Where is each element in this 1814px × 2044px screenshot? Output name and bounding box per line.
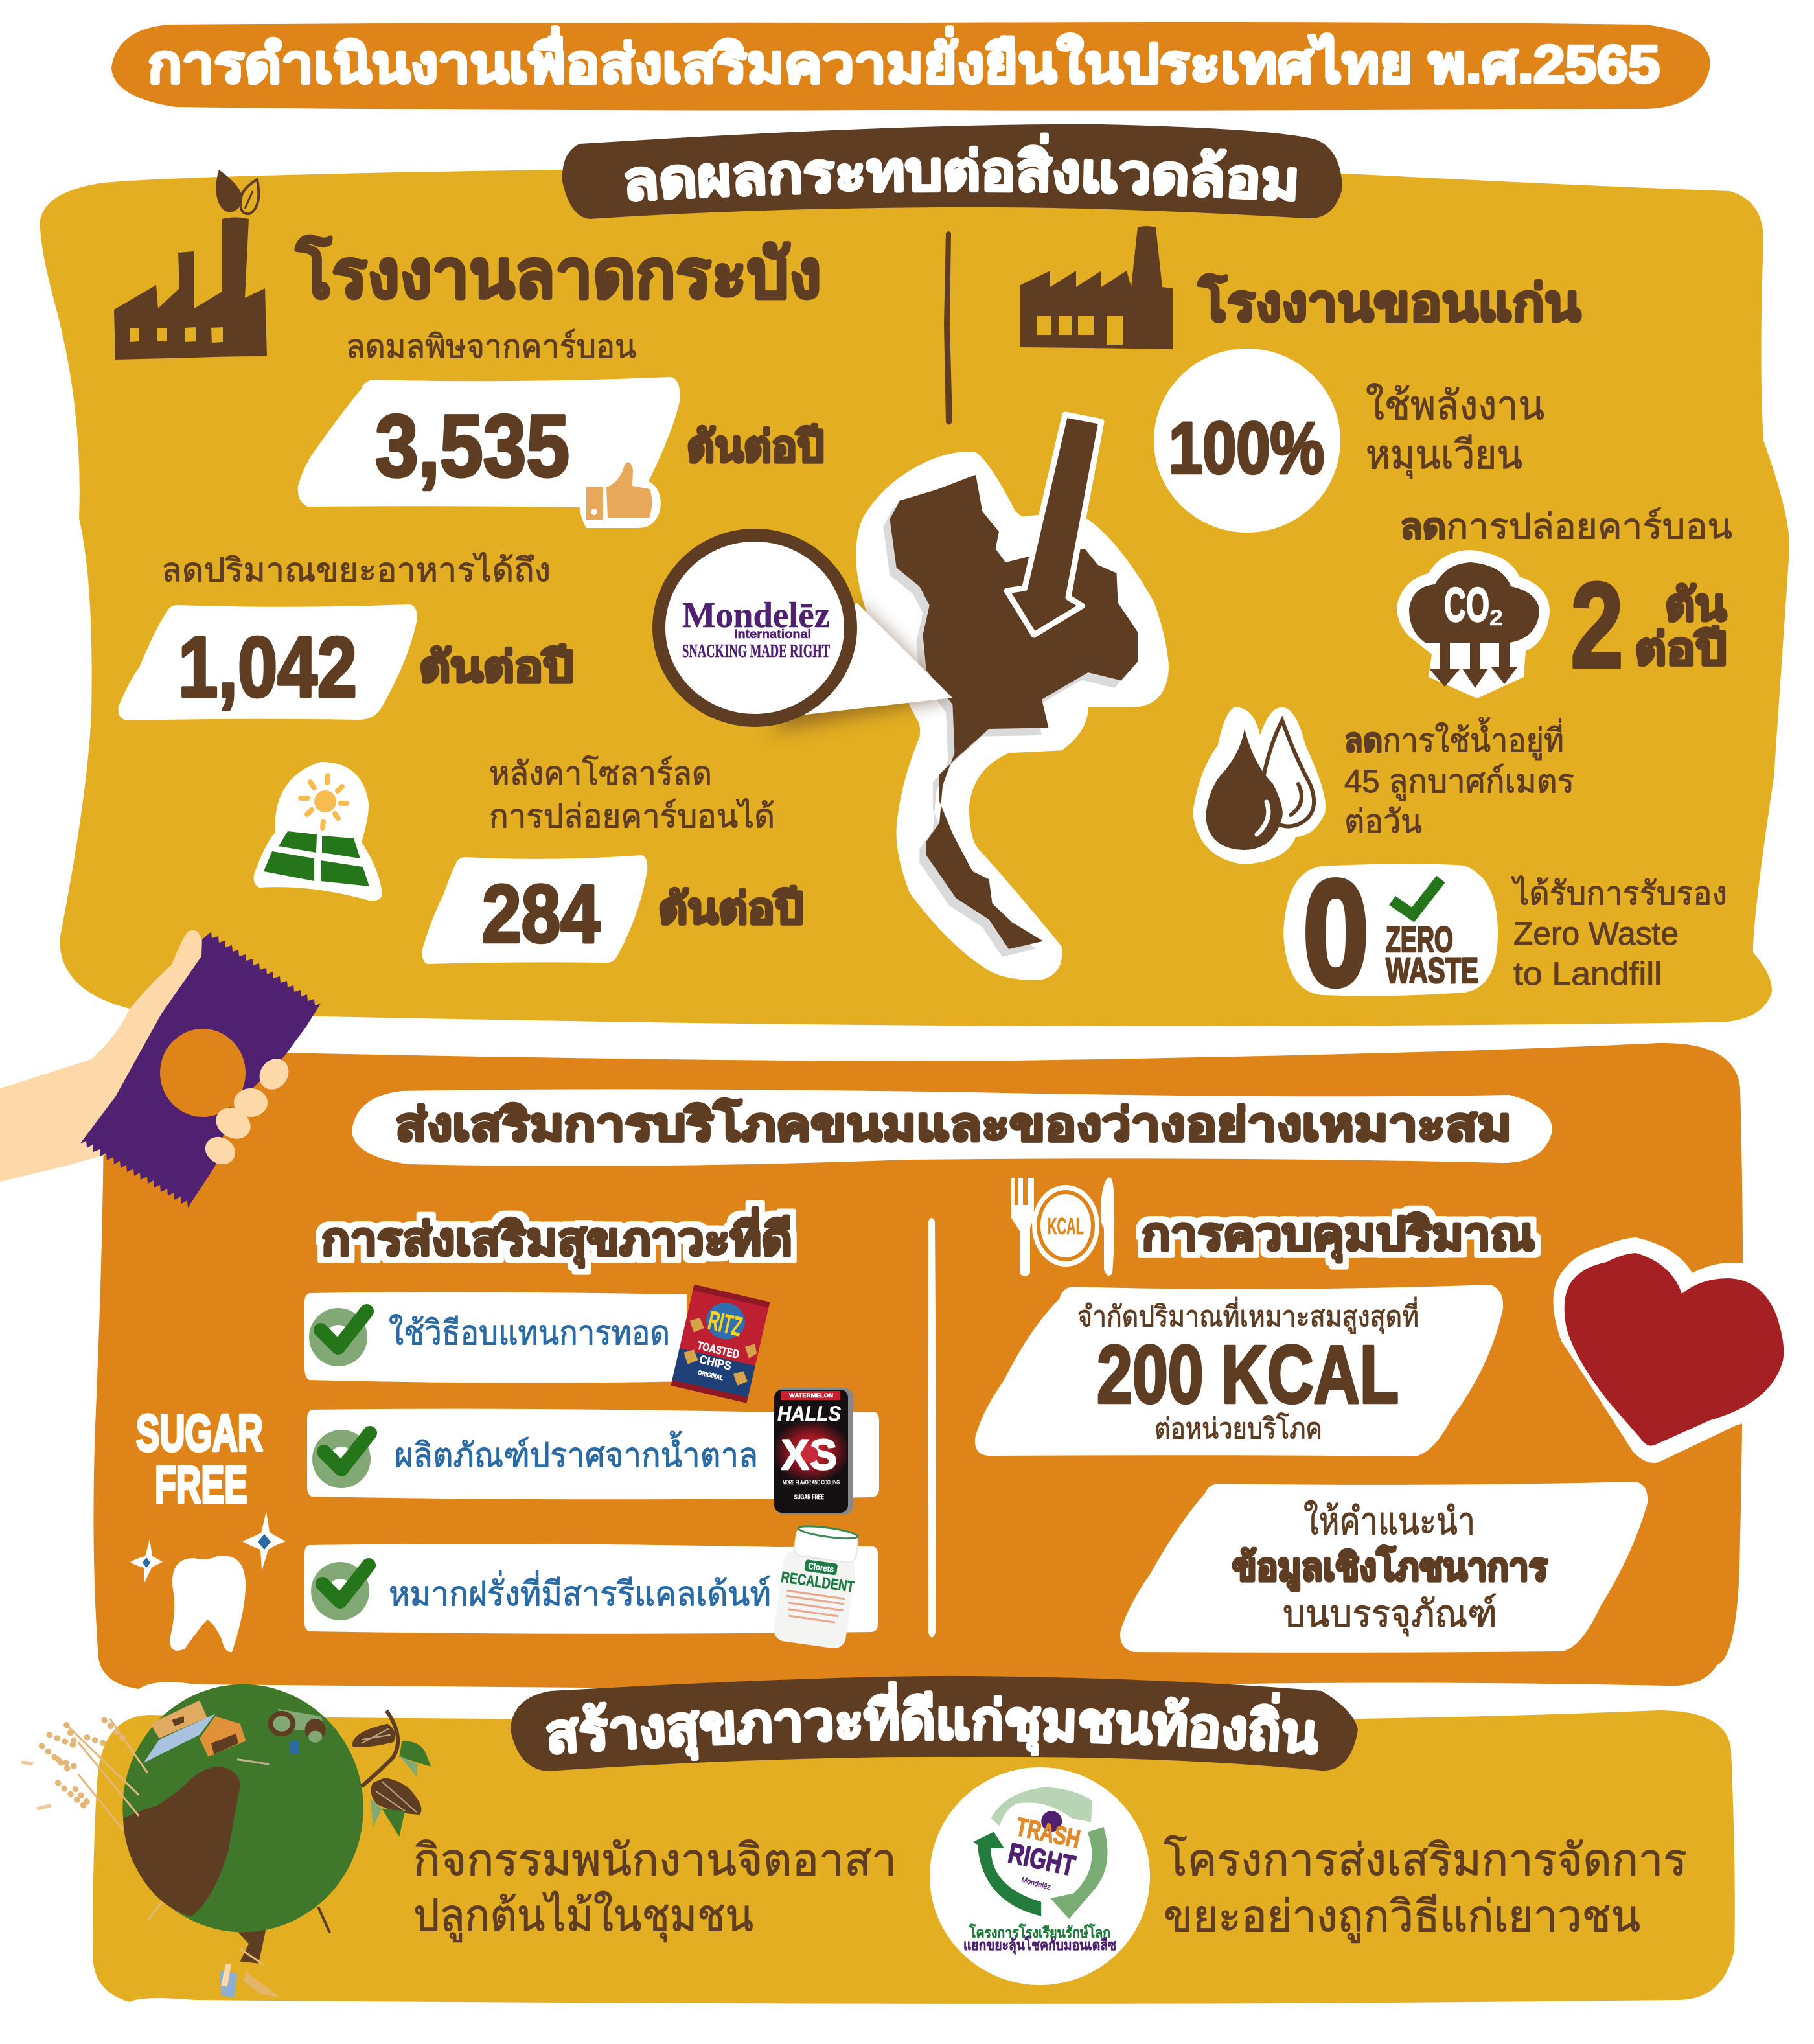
text: solar roof	[489, 755, 775, 834]
panel: snacking	[93, 1043, 1808, 1691]
logo: Trash Right: RIGHT	[1005, 1837, 1078, 1882]
text: volunteer planting	[413, 1835, 897, 1942]
text: tons per year: ตันต่อปี	[658, 884, 803, 932]
logo: Trash Right	[930, 1767, 1150, 1985]
stat card 3,535	[298, 377, 680, 507]
callout: Mondelez logo	[659, 535, 952, 732]
text: carbon emission: ลดการปล่อยคาร์บอน	[1400, 507, 1732, 546]
callout: Mondelez logo: International	[734, 628, 811, 641]
text: water reduction	[1344, 717, 1574, 840]
text: renewable energy	[1366, 383, 1544, 479]
product: Clorets: RECALDENT	[780, 1568, 856, 1596]
title banner	[111, 22, 1710, 111]
product: Halls: WATERMELON	[789, 1392, 833, 1399]
card: 200 kcal: 200 KCAL	[1097, 1329, 1399, 1420]
text: water reduction: ต่อวัน	[1344, 803, 1422, 840]
product: Halls: HALLS	[777, 1402, 842, 1425]
text: carbon reduction: ลดมลพิษจากคาร์บอน	[346, 328, 636, 365]
product: Clorets: Clorets	[807, 1561, 834, 1574]
map: Thailand	[856, 415, 1169, 980]
stat card 284: 284	[482, 868, 600, 959]
text: sugar free	[136, 1404, 263, 1513]
icon: tooth with sparkles	[130, 1511, 286, 1652]
badge: zero waste: ZERO	[1386, 919, 1453, 959]
illustration: hand holding snack	[0, 930, 321, 1208]
heading: Khon Kaen factory: โรงงานขอนแก่น	[1198, 273, 1581, 332]
stat card 3,535: 3,535	[375, 396, 569, 495]
logo: Trash Right: Mondelēz	[1020, 1875, 1051, 1892]
heading: mindful snacking: ส่งเสริมการบริโภคขนมและของว่างอย่างเหมาะสม	[395, 1098, 1511, 1150]
card: nutrition info: ข้อมูลเชิงโภชนาการ	[1232, 1544, 1548, 1590]
row: sugar free products: ผลิตภัณฑ์ปราศจากน้ำตาล	[395, 1431, 758, 1475]
text: volunteer planting: กิจกรรมพนักงานจิตอาสา	[413, 1835, 897, 1885]
card: 200 kcal	[975, 1285, 1503, 1456]
divider	[944, 231, 952, 425]
icon: CO2 cloud: CO	[1444, 578, 1489, 632]
stat: 2 tons per year: ต่อปี	[1635, 625, 1727, 674]
row: bake not fry	[304, 1292, 687, 1383]
stat card 284	[422, 855, 647, 964]
text: sugar free: FREE	[155, 1456, 247, 1513]
card: nutrition info	[1120, 1482, 1648, 1653]
badge: zero waste	[1283, 849, 1498, 1017]
text: tons per year: ตันต่อปี	[687, 422, 824, 470]
stat: 2 tons per year	[1570, 557, 1727, 693]
row: bake not fry: ใช้วิธีอบแทนการทอด	[389, 1314, 670, 1352]
product: Halls	[774, 1388, 853, 1515]
title banner: การดำเนินงานเพื่อส่งเสริมความยั่งยืนในประเทศไทย พ.ศ.2565	[148, 27, 1660, 94]
badge: zero waste: 0	[1303, 849, 1369, 1017]
icon: kcal plate: KCAL	[1048, 1213, 1084, 1239]
card: 200 kcal: ต่อหน่วยบริโภค	[1154, 1412, 1322, 1445]
icon: CO2 cloud	[1397, 550, 1550, 698]
product: Ritz: ORIGINAL	[697, 1370, 724, 1382]
row: recaldent gum: หมากฝรั่งที่มีสารรีแคลเด้นท์	[389, 1570, 771, 1613]
icon: solar panel	[254, 762, 382, 901]
text: waste education	[1164, 1835, 1687, 1943]
heading: reduce environmental impact: ลดผลกระทบต่อสิ่งแวดล้อม	[625, 132, 1297, 202]
text: food waste: ลดปริมาณขยะอาหารได้ถึง	[161, 552, 551, 588]
row: sugar free products	[307, 1409, 879, 1499]
divider	[928, 1218, 936, 1638]
icon: Khon Kaen factory	[1020, 226, 1173, 349]
text: certification: Zero Waste	[1513, 915, 1679, 952]
icon: thumbs up	[579, 459, 661, 528]
text: water reduction: 45 ลูกบาศก์เมตร	[1344, 763, 1574, 801]
text: renewable energy: ใช้พลังงาน	[1366, 383, 1544, 428]
product: Halls: XS	[781, 1430, 837, 1478]
text: tons per year: ตันต่อปี	[419, 643, 573, 691]
card: nutrition info: บนบรรจุภัณฑ์	[1283, 1593, 1497, 1637]
text: solar roof: หลังคาโซลาร์ลด	[489, 755, 712, 792]
logo: Trash Right: แยกขยะลุ้นโชคกับมอนเดลีซ	[963, 1936, 1116, 1955]
stat: 2 tons per year: ตัน	[1665, 580, 1727, 630]
text: waste education: โครงการส่งเสริมการจัดการ	[1164, 1835, 1687, 1885]
heading: Lat Krabang factory: โรงงานลาดกระบัง	[295, 235, 821, 312]
text: sugar free: SUGAR	[136, 1404, 263, 1462]
text: renewable energy: หมุนเวียน	[1366, 433, 1522, 479]
stat: 2 tons per year: 2	[1570, 557, 1624, 693]
logo: Trash Right: โครงการโรงเรียนรักษ์โลก	[969, 1923, 1110, 1941]
text: certification: to Landfill	[1513, 956, 1662, 992]
stat circle 100%	[1154, 349, 1340, 533]
badge: zero waste: WASTE	[1386, 950, 1478, 991]
heading: wellbeing: การส่งเสริมสุขภาวะที่ดี	[321, 1207, 792, 1268]
text: waste education: ขยะอย่างถูกวิธีแก่เยาวชน	[1164, 1892, 1640, 1943]
stat circle 100%: 100%	[1169, 408, 1324, 488]
stat card 1,042	[118, 604, 417, 720]
icon: CO2 cloud: 2	[1489, 606, 1503, 630]
text: certification	[1511, 875, 1727, 992]
product: Clorets	[772, 1522, 862, 1650]
illustration: tree globe	[21, 1684, 431, 1998]
text: certification: ได้รับการรับรอง	[1511, 875, 1727, 912]
icon: water drops	[1193, 707, 1326, 864]
callout: Mondelez logo: Mondelēz	[682, 595, 830, 636]
stat card 1,042: 1,042	[178, 619, 357, 715]
product: Ritz: TOASTED	[696, 1339, 741, 1361]
product: Halls: MORE FLAVOR AND COOLING	[783, 1479, 840, 1486]
product: Ritz	[671, 1285, 770, 1403]
callout: Mondelez logo: SNACKING MADE RIGHT	[682, 641, 830, 661]
panel: community	[21, 1675, 1735, 2004]
heading: portion control: การควบคุมปริมาณ	[1142, 1209, 1535, 1263]
card: nutrition info: ให้คำแนะนำ	[1303, 1500, 1475, 1543]
heading: mindful snacking	[352, 1089, 1552, 1166]
icon: kcal plate	[1011, 1178, 1114, 1276]
icon: heart	[1554, 1237, 1808, 1463]
product: Ritz: RITZ	[706, 1305, 745, 1342]
text: water reduction: ลดการใช้น้ำอยู่ที่	[1344, 717, 1564, 760]
panel: environment	[40, 124, 1789, 1026]
product: Ritz: CHIPS	[698, 1353, 733, 1373]
product: Halls: SUGAR FREE	[794, 1493, 824, 1501]
heading: community wellbeing: สร้างสุขภาวะที่ดีแก่ชุมชนท้องถิ่น	[545, 1681, 1319, 1761]
text: volunteer planting: ปลูกต้นไม้ในชุมชน	[413, 1890, 753, 1942]
logo: Trash Right: TRASH	[1013, 1813, 1083, 1854]
heading: reduce environmental impact	[562, 124, 1342, 219]
card: 200 kcal: จำกัดปริมาณที่เหมาะสมสูงสุดที่	[1077, 1296, 1419, 1334]
row: recaldent gum	[304, 1544, 878, 1634]
text: solar roof: การปล่อยคาร์บอนได้	[489, 798, 775, 834]
icon: leaf factory	[114, 170, 267, 360]
